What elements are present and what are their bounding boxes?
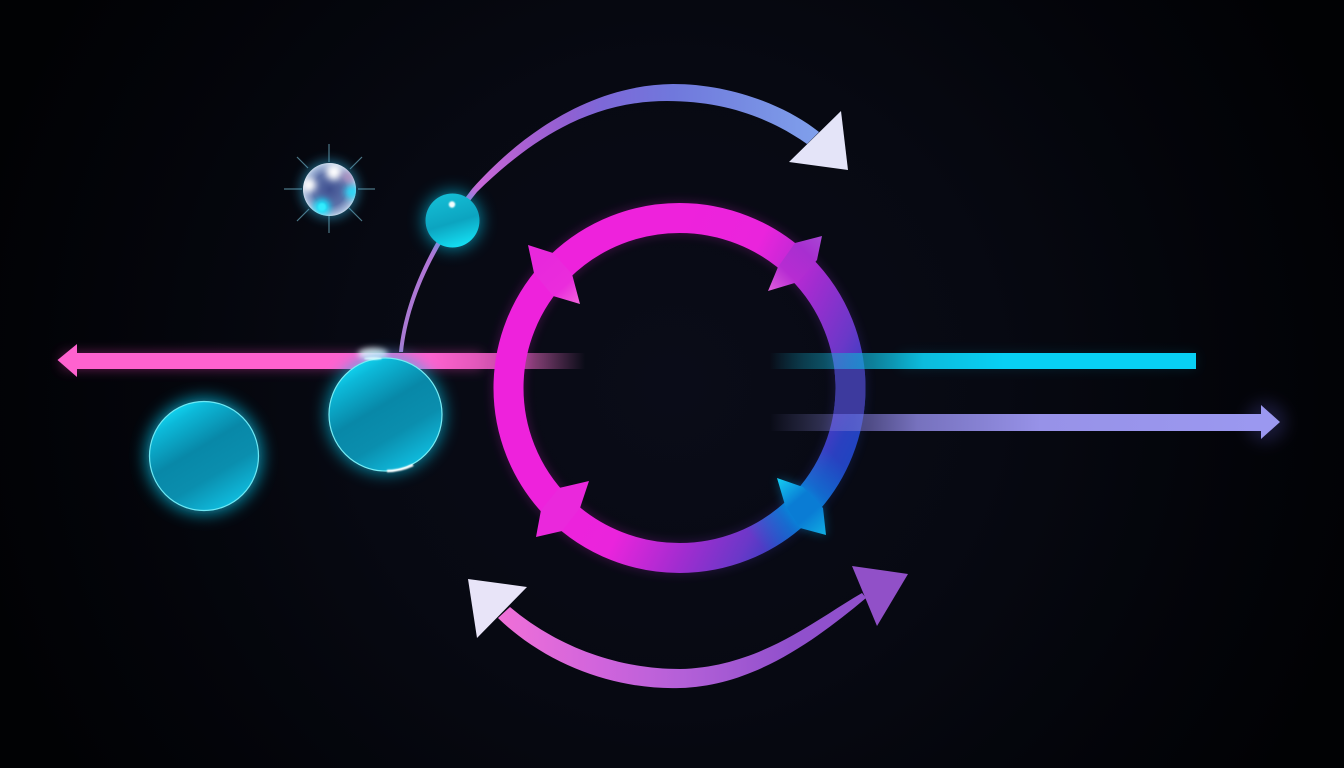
ring arrowhead: bottom right (777, 478, 826, 535)
sphere: left cyan (146, 398, 262, 514)
ring arrowhead: top right (768, 236, 822, 291)
arrowhead: right violet (852, 566, 908, 626)
arrowhead: left pale (468, 579, 527, 638)
sphere: small cyan (424, 192, 482, 250)
arrow: top curved arc (399, 84, 848, 352)
arrow: violet right-pointing bar (770, 402, 1286, 442)
arrowhead: top pale (789, 111, 848, 170)
arrow: cyan bar (770, 353, 1196, 369)
main magenta ring (508, 218, 850, 558)
sphere: centre cyan (326, 348, 444, 474)
ring arrowhead: top left (528, 245, 580, 304)
ring arrowhead: bottom left (536, 481, 589, 537)
sphere: pearl sparkle (284, 144, 375, 233)
arrow: pink left-pointing bar (58, 344, 585, 377)
arrow: bottom curved arc (468, 566, 908, 688)
